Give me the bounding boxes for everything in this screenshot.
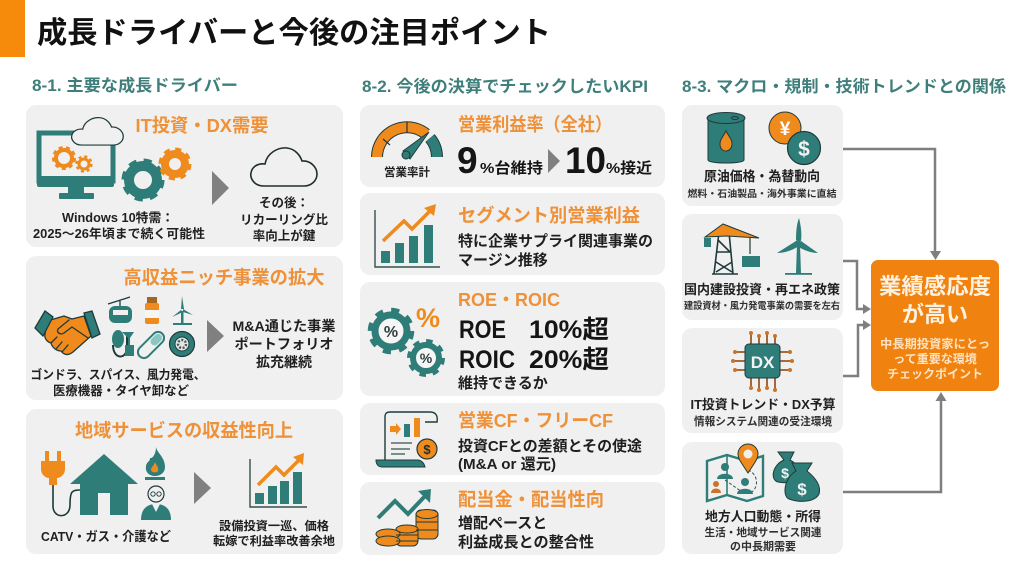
icon: elderly person	[141, 486, 171, 520]
icon: cash flow document: $	[423, 442, 431, 457]
callout: high earnings sensitivity	[871, 260, 999, 391]
text: cash flow body	[458, 437, 642, 473]
icon: map with people and pin	[707, 444, 763, 501]
text: Windows 10 demand: 2025〜26年頃まで続く可能性	[33, 226, 206, 241]
panel heading: segment profit: セグメント別営業利益	[458, 205, 640, 226]
text: niche business list	[30, 367, 206, 398]
text: Windows 10 demand	[33, 210, 206, 241]
panel heading: dividends: 配当金・配当性向	[458, 489, 604, 510]
text: oil detail: 燃料・石油製品・海外事業に直結	[688, 187, 837, 200]
text: recurring ratio: その後：	[259, 195, 309, 210]
text: price pass through	[213, 518, 335, 548]
icon: gauge	[377, 122, 437, 159]
panel: operating and free cash flow	[360, 403, 665, 475]
icon: DX chip	[731, 331, 794, 392]
heading: 8-2: 8-2. 今後の決算でチェックしたいKPI	[362, 76, 648, 96]
text: cash flow body: (M&A or 還元)	[458, 456, 556, 473]
icon: oil barrel	[707, 112, 745, 163]
text: M and A portfolio	[232, 318, 336, 370]
text: margin target: %接近	[606, 159, 652, 177]
text: gauge label: 営業率計	[384, 165, 430, 179]
icon: yen and dollar coins: $	[798, 138, 810, 161]
panel: high margin niche business	[26, 256, 343, 400]
panel heading: IT investment: IT投資・DX需要	[136, 115, 268, 136]
panel heading: operating margin: 営業利益率（全社）	[458, 114, 612, 135]
icon: percent gears: %	[384, 324, 398, 341]
icon: gas flame	[145, 447, 165, 480]
panel heading: niche business: 高収益ニッチ事業の拡大	[124, 267, 324, 288]
panel: oil and FX	[682, 105, 843, 206]
icon: money bags	[773, 452, 820, 501]
arrow: population to sensitivity	[843, 392, 946, 492]
icon: yen and dollar coins: ¥	[780, 119, 791, 140]
text: ROE target: ROE	[459, 316, 506, 344]
text: segment body: 特に企業サプライ関連事業の	[458, 232, 653, 250]
text: margin target: 10	[565, 140, 606, 181]
text: callout heading: 業績感応度	[879, 274, 991, 299]
text: maintain: 維持できるか	[458, 374, 548, 392]
text: callout detail: って重要な環境	[893, 351, 977, 366]
icon: medical pump	[112, 330, 134, 357]
text: construction heading: 国内建設投資・再エネ政策	[684, 282, 840, 297]
orange corner block	[0, 0, 25, 57]
text: niche business list: ゴンドラ、スパイス、風力発電、	[30, 367, 206, 382]
text: cash flow body: 投資CFとの差額とその使途	[458, 437, 642, 455]
text: segment body: マージン推移	[458, 251, 548, 269]
panel: construction and renewable energy	[682, 214, 843, 320]
icon: small wind turbine	[172, 296, 193, 325]
icon: gondola	[108, 297, 132, 323]
text: IT trend heading: IT投資トレンド・DX予算	[690, 397, 836, 412]
icon: medicine capsule	[135, 329, 167, 361]
icon: handshake	[35, 311, 100, 355]
text: dividends body: 利益成長との整合性	[458, 533, 594, 551]
icon: DX chip: DX	[751, 353, 775, 372]
text: segment body	[458, 232, 653, 269]
panel: IT investment and DX demand	[26, 105, 343, 247]
arrow: IT trend to sensitivity	[843, 320, 871, 376]
panel: operating margin	[360, 105, 665, 187]
icon: percent gears: %	[420, 350, 433, 366]
icon: electric plug	[41, 451, 80, 516]
text: population detail	[704, 525, 822, 553]
text: dividends body: 増配ペースと	[458, 514, 547, 532]
icon: money bags: $	[797, 480, 807, 499]
text: population heading: 地方人口動態・所得	[705, 509, 821, 524]
text: population detail: 生活・地域サービス関連	[704, 525, 822, 539]
text: ROE target: 10%超	[529, 316, 609, 344]
text: ROIC target: ROIC	[459, 346, 515, 374]
icon: cloud	[251, 148, 317, 186]
panel: dividends	[360, 482, 665, 555]
icon: cash flow document	[376, 412, 437, 467]
heading: 8-3: 8-3. マクロ・規制・技術トレンドとの関係	[682, 77, 1007, 96]
text: oil heading: 原油価格・為替動向	[704, 168, 820, 184]
text: callout detail: チェックポイント	[887, 367, 983, 381]
icon: house	[70, 454, 138, 515]
arrow: niche next step	[207, 320, 224, 352]
arrow: IT next step	[212, 171, 229, 205]
panel: regional services	[26, 409, 343, 554]
text: M and A portfolio: M&A通じた事業	[232, 318, 336, 334]
title: 成長ドライバーと今後の注目ポイント	[37, 17, 551, 50]
icon: segment chart	[375, 204, 440, 267]
text: callout detail	[880, 336, 990, 381]
text: M and A portfolio: 拡充継続	[256, 354, 312, 370]
icon: yen and dollar coins	[769, 112, 820, 164]
icon: tire	[170, 332, 194, 356]
icon: spice bottle	[145, 297, 159, 324]
panel heading: cash flow: 営業CF・フリーCF	[458, 410, 613, 431]
icon: percent gears: %	[416, 303, 440, 333]
text: margin target	[457, 140, 652, 181]
icon: monitor with gears and cloud	[37, 118, 123, 199]
text: callout heading: が高い	[902, 302, 968, 327]
text: regional services list: CATV・ガス・介護など	[41, 529, 171, 544]
icon: money bags: $	[781, 465, 789, 481]
text: ROIC target	[459, 346, 609, 374]
panel heading: regional services: 地域サービスの収益性向上	[75, 420, 293, 441]
text: price pass through: 設備投資一巡、価格	[219, 518, 329, 533]
panel: segment profit	[360, 193, 665, 275]
icon: percent gears	[370, 303, 443, 375]
text: callout heading	[879, 274, 991, 327]
panel: ROE ROIC	[360, 282, 665, 396]
text: recurring ratio	[240, 195, 328, 243]
text: M and A portfolio: ポートフォリオ	[234, 336, 334, 352]
text: dividends body	[458, 514, 594, 551]
arrow: oil to sensitivity	[843, 149, 941, 260]
text: niche business list: 医療機器・タイヤ卸など	[53, 383, 190, 398]
icon: crane	[704, 224, 760, 274]
text: callout detail: 中長期投資家にとっ	[880, 336, 990, 351]
text: price pass through: 転嫁で利益率改善余地	[213, 533, 335, 548]
icon: growth chart	[250, 453, 307, 507]
panel: IT trend	[682, 328, 843, 433]
text: recurring ratio: 率向上が鍵	[253, 228, 316, 243]
panel: regional population and income	[682, 442, 843, 554]
icon: large gears	[124, 150, 190, 199]
arrow: regional next step	[194, 472, 211, 504]
text: ROIC target: 20%超	[529, 346, 609, 374]
icon: coins and rising arrow	[376, 489, 438, 546]
text: margin target: 9	[457, 140, 478, 181]
text: recurring ratio: リカーリング比	[240, 212, 328, 227]
text: IT trend detail: 情報システム関連の受注環境	[694, 414, 832, 428]
text: margin target: %台維持	[480, 159, 543, 177]
text: ROE target	[459, 316, 609, 344]
panel heading: ROE ROIC: ROE・ROIC	[458, 289, 560, 310]
arrow: construction to sensitivity	[843, 261, 871, 314]
icon: wind turbine	[777, 218, 818, 275]
arrow: margin	[548, 149, 560, 173]
text: construction detail: 建設資材・風力発電事業の需要を左右	[684, 300, 840, 311]
text: Windows 10 demand: Windows 10特需：	[62, 210, 174, 225]
heading: 8-1: 8-1. 主要な成長ドライバー	[32, 75, 238, 95]
text: population detail: の中長期需要	[730, 539, 796, 553]
